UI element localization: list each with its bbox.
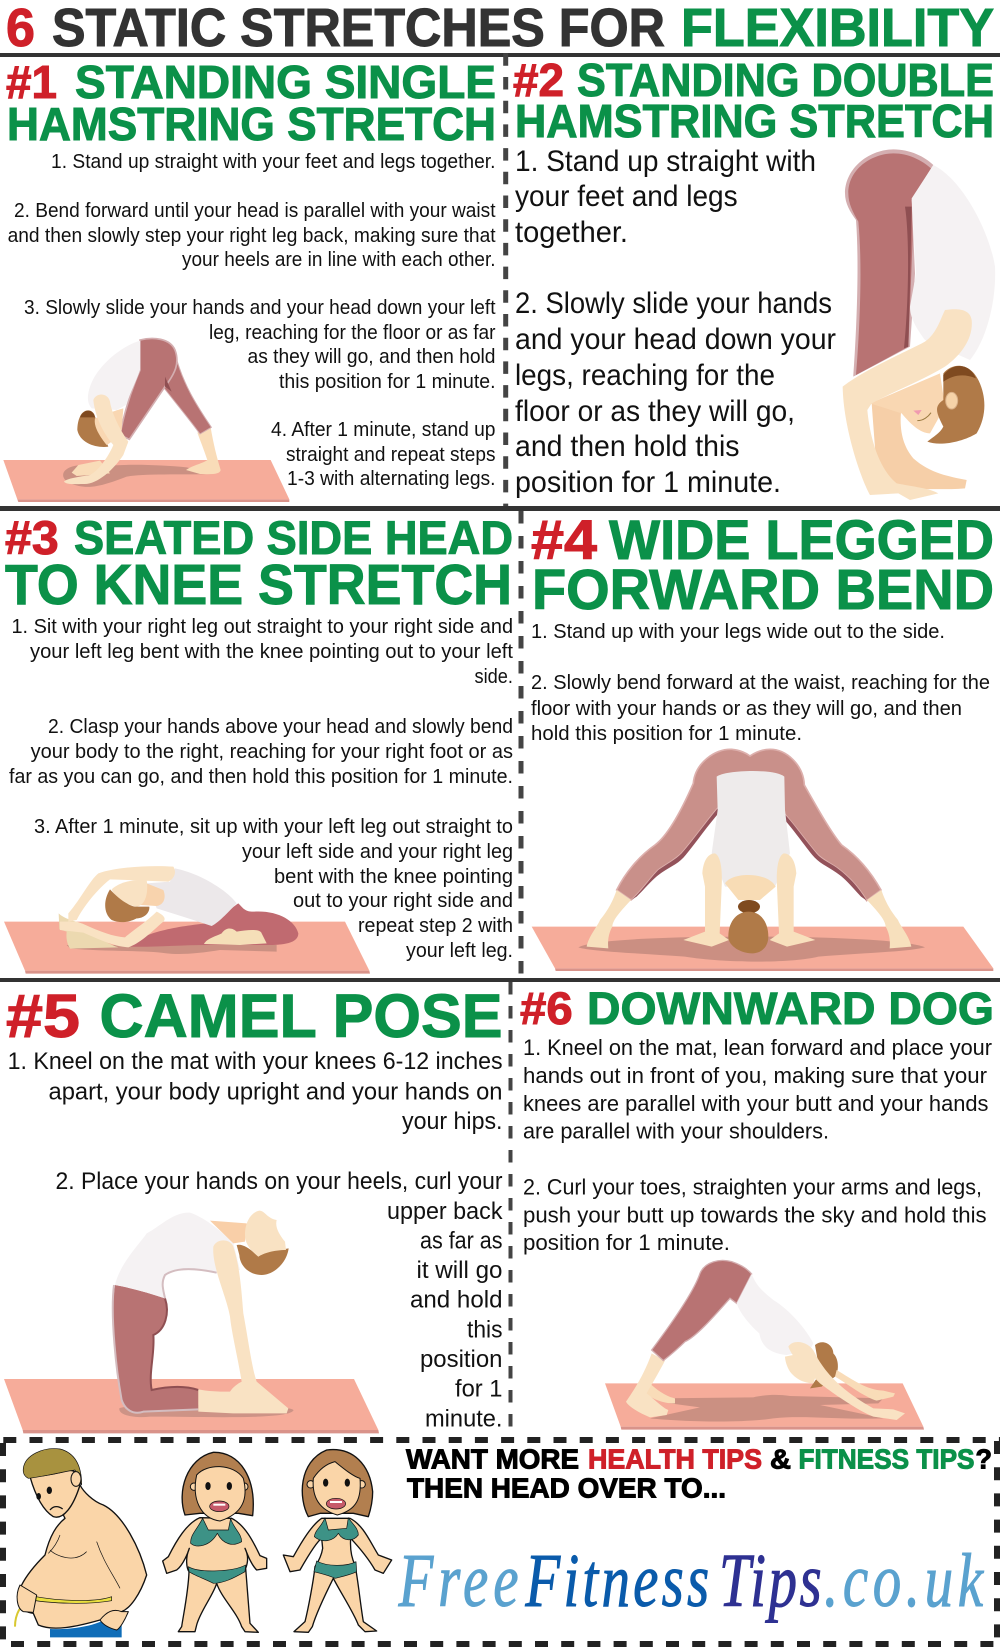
steps: stretch 6: position for 1 minute. [523, 1230, 730, 1255]
steps: stretch 4 [531, 620, 990, 745]
heading: stretch 1: #1 [6, 56, 57, 108]
steps: stretch 3: your left side and your right leg [242, 840, 513, 863]
steps: stretch 1: 1-3 with alternating legs. [287, 468, 496, 490]
illustration: double hamstring stretch [843, 149, 995, 500]
steps: stretch 6: push your butt up towards the sky and hold this [523, 1203, 987, 1228]
website logo text: Tips [719, 1538, 822, 1623]
heading: stretch 2 [513, 54, 994, 147]
steps: stretch 6: hands out in front of you, making sure that your [523, 1063, 987, 1088]
steps: stretch 2: and your head down your [515, 323, 836, 356]
steps: stretch 4: 1. Stand up with your legs wide out to the side. [531, 620, 945, 643]
heading: stretch 5: CAMEL POSE [100, 982, 502, 1051]
heading: stretch 4 [531, 508, 994, 622]
steps: stretch 4: 2. Slowly bend forward at the waist, reaching for the [531, 671, 990, 694]
illustration: downward dog on mat [605, 1260, 924, 1430]
steps: stretch 5: this [467, 1316, 502, 1344]
steps: stretch 3: far as you can go, and then hold this position for 1 minute. [9, 765, 513, 788]
steps: stretch 1: your heels are in line with each other. [182, 249, 496, 271]
steps: stretch 5: as far as [420, 1228, 502, 1254]
heading: stretch 1: STANDING SINGLE [75, 56, 496, 108]
call to action text: HEALTH TIPS [588, 1444, 762, 1475]
illustration: seated side head to knee stretch on mat [4, 866, 370, 974]
steps: stretch 1: 4. After 1 minute, stand up [271, 419, 496, 441]
heading: stretch 4: #4 [531, 508, 597, 571]
steps: stretch 1: straight and repeat steps [286, 444, 496, 466]
illustration: wide legged forward bend on mat [532, 749, 993, 971]
steps: stretch 5: for 1 [455, 1376, 502, 1403]
steps: stretch 6: knees are parallel with your butt and your hands [523, 1091, 988, 1116]
steps: stretch 6 [523, 1035, 992, 1255]
steps: stretch 5: upper back [387, 1198, 503, 1225]
call to action text: ? [976, 1444, 992, 1475]
website logo text: Fitness [525, 1538, 709, 1623]
call to action text: & [770, 1444, 791, 1475]
heading: stretch 1 [6, 56, 496, 150]
panel: stretch 6 [520, 983, 994, 1430]
heading: stretch 3 [5, 512, 513, 617]
website logo text [398, 1538, 984, 1623]
steps: stretch 2: 2. Slowly slide your hands [515, 287, 832, 320]
illustration: single hamstring stretch on mat [3, 338, 289, 502]
steps: stretch 1 [8, 151, 496, 490]
steps: stretch 3: out to your right side and [293, 889, 513, 912]
steps: stretch 2: legs, reaching for the [515, 359, 775, 392]
steps: stretch 2: your feet and legs [515, 180, 738, 213]
steps: stretch 5: it will go [416, 1257, 502, 1284]
illustration: larger woman in bikini [163, 1452, 267, 1632]
steps: stretch 4: floor with your hands or as they will go, and then [531, 697, 962, 720]
steps: stretch 3: your left leg. [406, 939, 513, 962]
title [6, 0, 994, 58]
steps: stretch 3: your left leg bent with the knee pointing out to your left [30, 640, 513, 663]
panel: stretch 2 [513, 54, 995, 500]
steps: stretch 5: position [420, 1346, 502, 1373]
heading: stretch 2: #2 [513, 54, 564, 106]
steps: stretch 1: 1. Stand up straight with your feet and legs together. [51, 151, 496, 173]
steps: stretch 2: together. [515, 216, 628, 249]
steps: stretch 3 [9, 615, 513, 962]
website logo text: Free [398, 1538, 519, 1623]
steps: stretch 3: your body to the right, reaching for your right foot or as [31, 740, 513, 763]
illustration: man measuring waist [15, 1449, 147, 1637]
title: 6 [6, 0, 35, 58]
steps: stretch 1: as they will go, and then hold [248, 346, 496, 368]
heading: stretch 6: DOWNWARD DOG [587, 983, 994, 1034]
steps: stretch 1: leg, reaching for the floor or as far [209, 322, 496, 344]
steps: stretch 3: repeat step 2 with [358, 914, 513, 937]
steps: stretch 1: 3. Slowly slide your hands and your head down your left [24, 297, 496, 319]
call to action text: FITNESS TIPS [798, 1444, 974, 1475]
title: FLEXIBILITY [681, 0, 994, 58]
steps: stretch 1: this position for 1 minute. [279, 371, 496, 393]
steps: stretch 5: 1. Kneel on the mat with your knees 6-12 inches [8, 1048, 503, 1075]
illustration: camel pose on mat [4, 1211, 379, 1433]
call to action text [406, 1444, 992, 1504]
steps: stretch 6: 1. Kneel on the mat, lean forward and place your [523, 1035, 992, 1060]
panel: promotional footer [3, 1440, 1000, 1644]
heading: stretch 4: FORWARD BEND [532, 558, 994, 622]
title: STATIC STRETCHES FOR [52, 0, 665, 58]
steps: stretch 1: 2. Bend forward until your head is parallel with your waist [14, 200, 496, 222]
panel: stretch 1 [3, 56, 496, 502]
steps: stretch 3: 3. After 1 minute, sit up with your left leg out straight to [34, 815, 513, 838]
heading: stretch 6: #6 [520, 983, 573, 1034]
heading: stretch 3: TO KNEE STRETCH [5, 553, 512, 617]
call to action text: THEN HEAD OVER TO... [407, 1473, 726, 1504]
steps: stretch 3: bent with the knee pointing [274, 865, 513, 888]
call to action text: WANT MORE [406, 1444, 579, 1475]
heading: stretch 4: WIDE LEGGED [609, 508, 994, 571]
illustration: slim woman in bikini [283, 1450, 392, 1632]
steps: stretch 5: and hold [410, 1287, 502, 1314]
website logo text: .co.uk [824, 1538, 984, 1623]
steps: stretch 5: 2. Place your hands on your heels, curl your [56, 1168, 502, 1195]
panel: stretch 5 [4, 982, 503, 1433]
steps: stretch 5: apart, your body upright and your hands on [48, 1078, 502, 1106]
steps: stretch 3: 2. Clasp your hands above your head and slowly bend [48, 715, 513, 738]
steps: stretch 5: your hips. [402, 1108, 502, 1135]
steps: stretch 1: and then slowly step your right leg back, making sure that [8, 225, 496, 247]
steps: stretch 2 [515, 145, 836, 499]
steps: stretch 2: 1. Stand up straight with [515, 145, 816, 178]
steps: stretch 2: position for 1 minute. [515, 466, 781, 499]
heading: stretch 5: #5 [6, 982, 80, 1051]
steps: stretch 6: 2. Curl your toes, straighten your arms and legs, [523, 1174, 982, 1200]
steps: stretch 2: floor or as they will go, [515, 395, 795, 428]
panel: stretch 3 [4, 512, 513, 974]
steps: stretch 2: and then hold this [515, 430, 740, 463]
panel: stretch 4 [531, 508, 994, 971]
heading: stretch 3: SEATED SIDE HEAD [74, 512, 513, 565]
steps: stretch 5 [8, 1048, 503, 1432]
steps: stretch 6: are parallel with your shoulders. [523, 1118, 829, 1143]
heading: stretch 3: #3 [5, 512, 59, 565]
steps: stretch 3: 1. Sit with your right leg out straight to your right side and [12, 615, 513, 638]
steps: stretch 3: side. [474, 665, 513, 688]
steps: stretch 5: minute. [425, 1405, 502, 1432]
steps: stretch 4: hold this position for 1 minute. [531, 722, 802, 745]
heading: stretch 1: HAMSTRING STRETCH [7, 98, 496, 150]
